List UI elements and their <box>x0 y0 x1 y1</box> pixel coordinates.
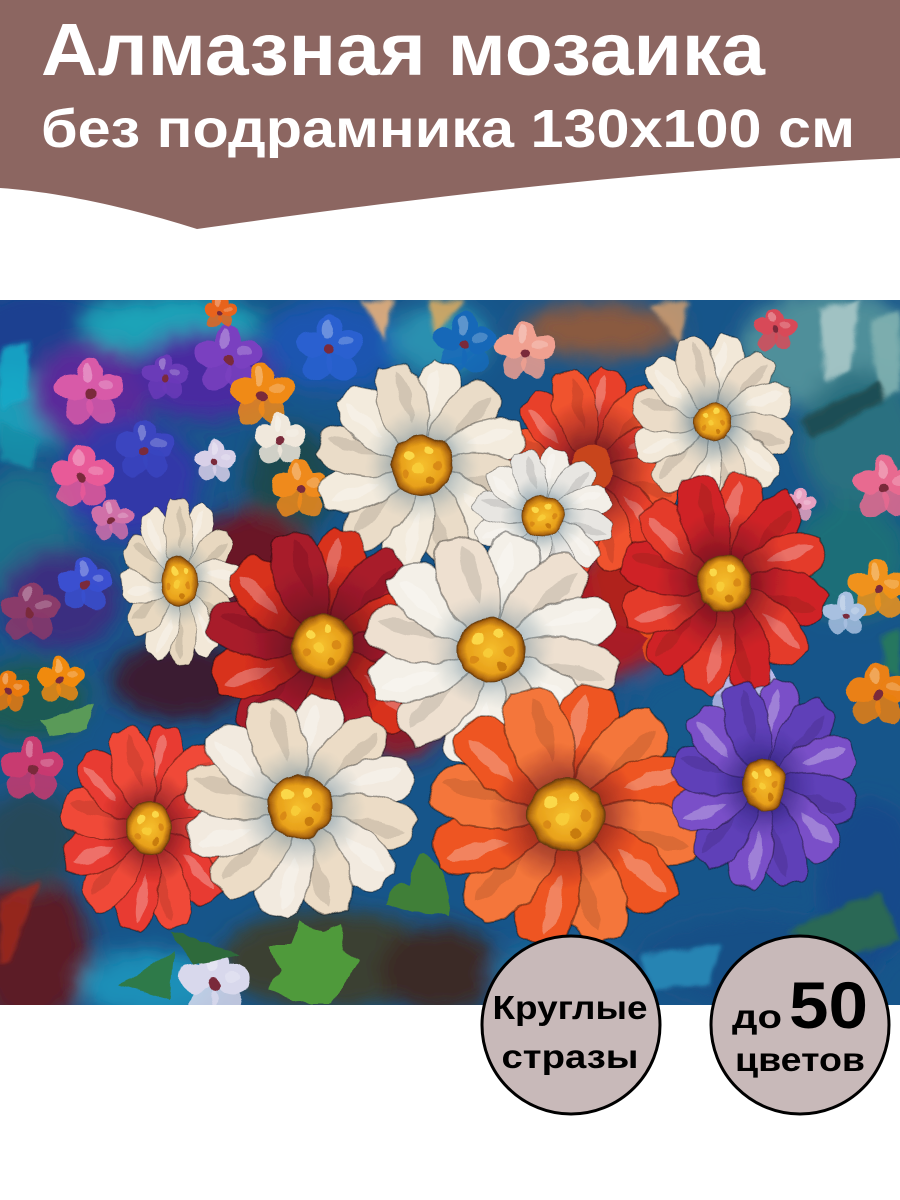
flower: red bottom left <box>60 724 224 934</box>
small background flowers <box>0 294 900 1023</box>
flower: red right <box>619 470 830 698</box>
subtitle: без подрамника 130х100 см <box>41 99 855 159</box>
title: Алмазная мозаика <box>41 8 766 91</box>
header banner <box>0 0 900 229</box>
badge: round rhinestones: стразы <box>502 1038 638 1075</box>
badge: up to 50 colours: 50 <box>789 968 868 1042</box>
leaves <box>40 705 450 1005</box>
badge: up to 50 colours <box>711 936 889 1114</box>
brush strokes <box>0 300 900 990</box>
painting: floral artwork <box>0 280 900 1030</box>
badge: round rhinestones <box>482 936 660 1114</box>
flower: red top centre <box>508 366 678 573</box>
flower: purple bottom right <box>670 678 858 892</box>
badge: round rhinestones: Круглые <box>492 989 648 1026</box>
flower: white top right <box>632 332 794 494</box>
flower: white top centre <box>315 359 526 566</box>
painted background <box>0 290 900 1030</box>
badge: up to 50 colours: цветов <box>735 1041 865 1078</box>
flower: small white <box>470 446 614 568</box>
flower: large red left <box>204 526 404 735</box>
flower: orange bottom centre <box>428 683 698 943</box>
flower: white left <box>119 498 240 666</box>
badge: up to 50 colours: до <box>732 998 782 1035</box>
flower: white bottom left <box>183 692 419 920</box>
flower: large white centre <box>362 530 621 764</box>
